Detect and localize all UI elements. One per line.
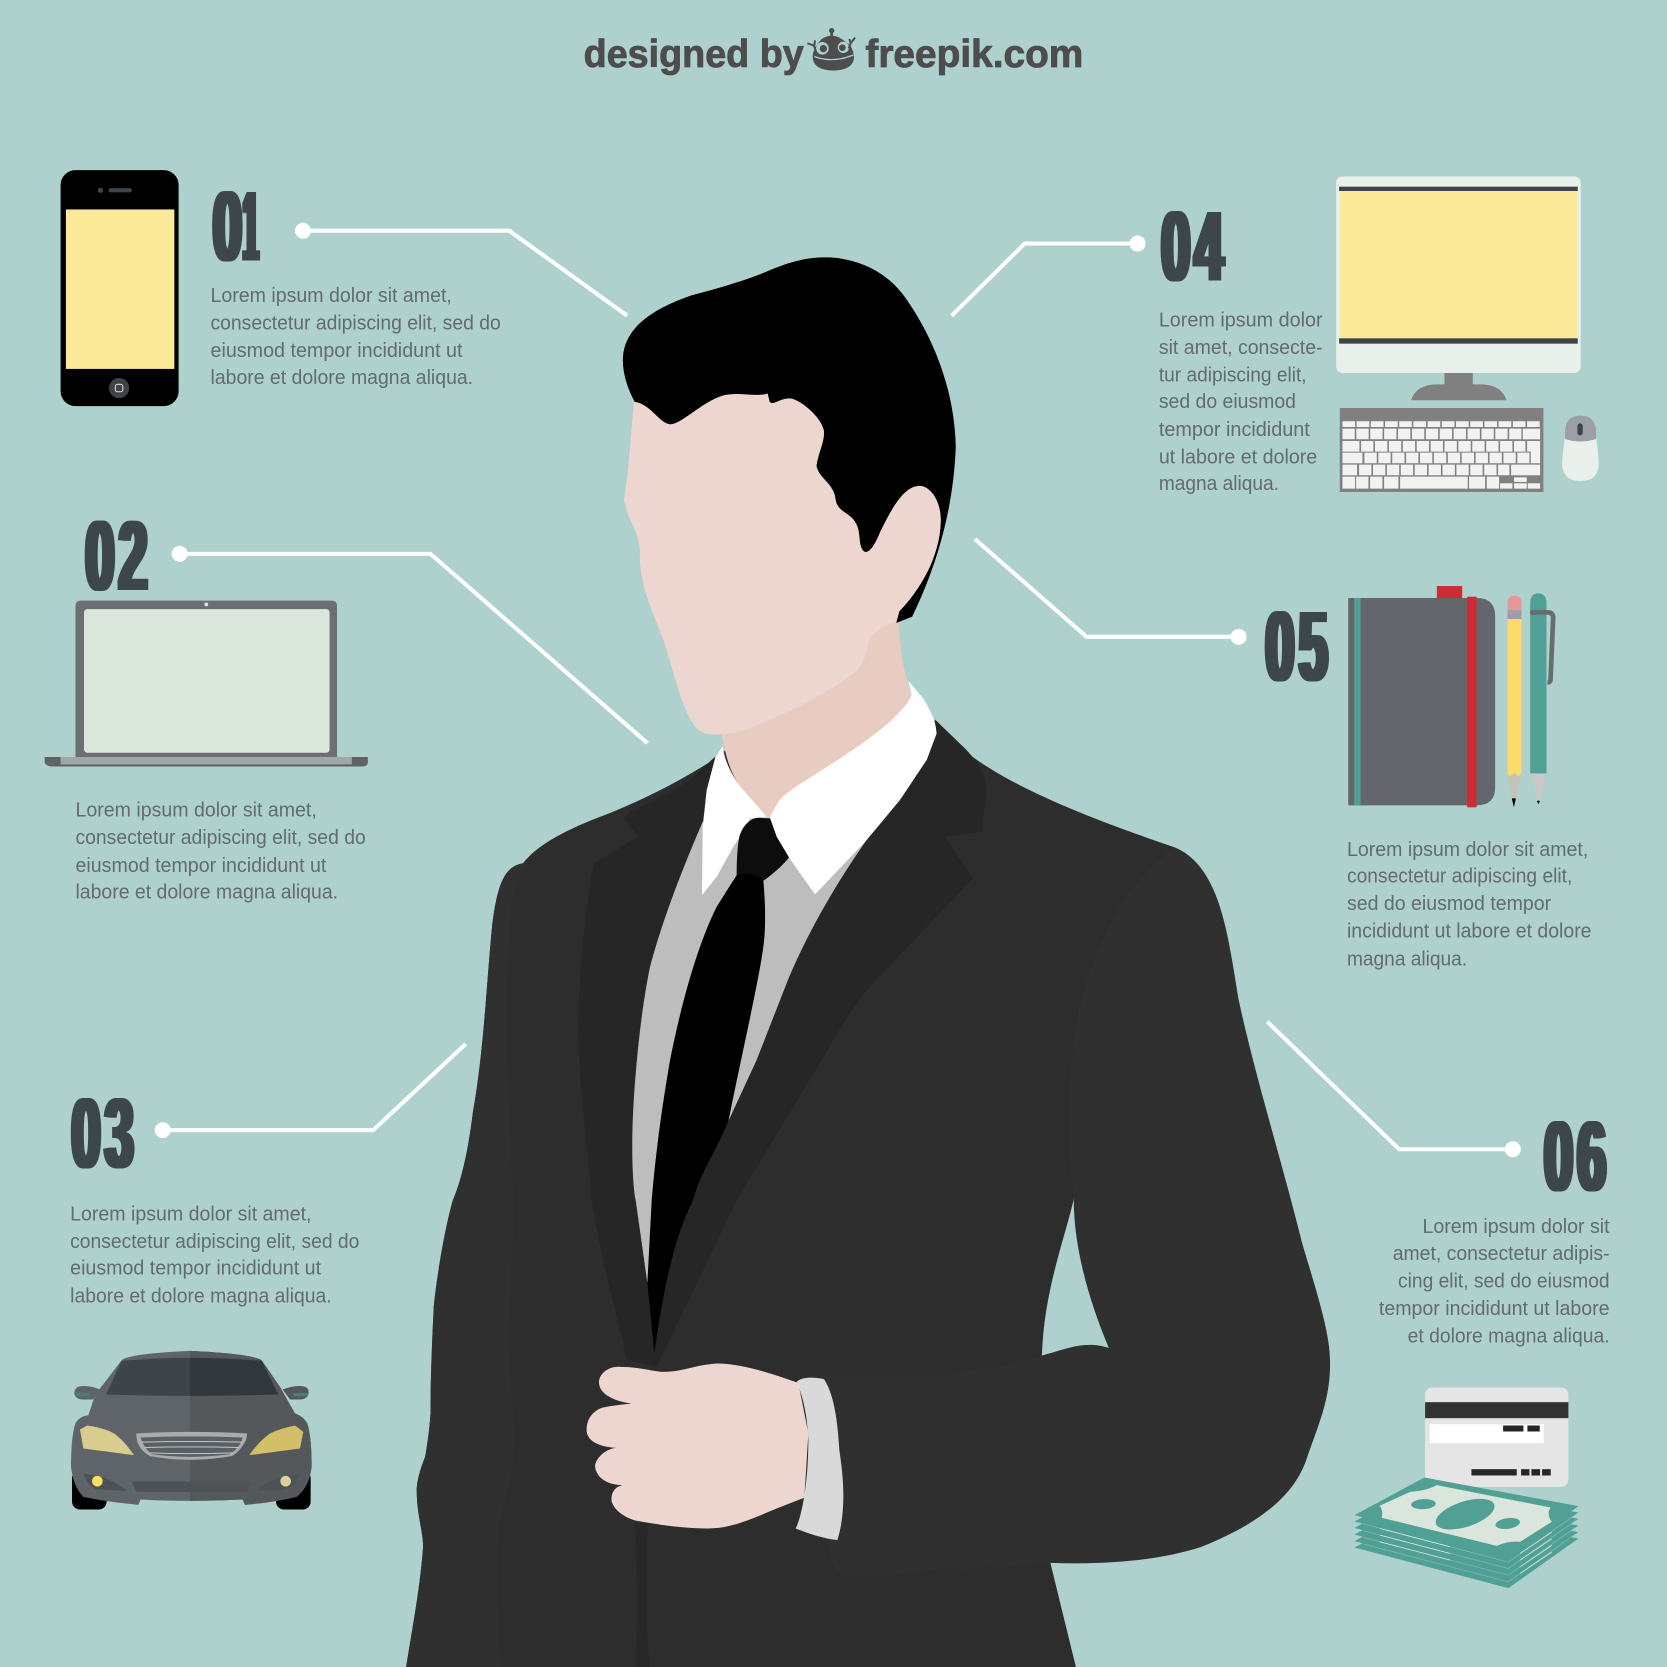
connector 04 xyxy=(952,235,1146,316)
connector 03 xyxy=(155,1044,466,1138)
pencil xyxy=(1508,596,1522,807)
neck xyxy=(722,617,912,822)
heading: 01: 0 xyxy=(213,171,242,282)
text block 04: tempor incididunt xyxy=(1159,418,1310,441)
text block 01: Lorem ipsum dolor sit amet, xyxy=(211,284,452,307)
text block 04: sed do eiusmod xyxy=(1159,390,1296,413)
shirt cuff xyxy=(796,1378,843,1540)
monitor xyxy=(1336,176,1581,400)
heading: 01 xyxy=(213,171,258,282)
mouse xyxy=(1562,416,1599,481)
text block 02: eiusmod tempor incididunt ut xyxy=(75,854,327,877)
notebook xyxy=(1348,586,1495,807)
banknotes xyxy=(1354,1477,1578,1588)
text block 03: labore et dolore magna aliqua. xyxy=(70,1284,332,1307)
tie knot xyxy=(737,818,789,881)
heading: 02: 02 xyxy=(86,501,147,611)
icon: credit card and banknotes xyxy=(1354,1388,1578,1588)
text block 05: magna aliqua. xyxy=(1347,947,1467,970)
text block 05: Lorem ipsum dolor sit amet, xyxy=(1347,838,1588,861)
text block 01: consectetur adipiscing elit, sed do xyxy=(211,312,501,335)
hair xyxy=(623,257,956,623)
text block 04: tur adipiscing elit, xyxy=(1159,364,1307,387)
header: designed by freepik.com: freepik.com xyxy=(865,32,1083,76)
figure: businessman xyxy=(406,257,1330,1667)
connector 02 xyxy=(172,546,647,743)
face xyxy=(624,372,941,735)
pen xyxy=(1530,593,1553,804)
text block 06: cing elit, sed do eiusmod xyxy=(1398,1269,1610,1292)
front seam xyxy=(635,1523,650,1667)
heading: 01: 1 xyxy=(243,173,258,282)
jacket xyxy=(406,721,1175,1667)
credit card xyxy=(1425,1388,1568,1487)
header: designed by freepik.com: designed by xyxy=(584,32,804,76)
heading: 03: 03 xyxy=(72,1078,134,1189)
heading: 06: 06 xyxy=(1544,1102,1606,1212)
icon: smartphone xyxy=(61,170,179,406)
header: designed by freepik.com xyxy=(584,28,1083,76)
text block 04: Lorem ipsum dolor xyxy=(1159,308,1323,331)
keyboard xyxy=(1340,408,1543,492)
connector 05 xyxy=(975,539,1247,645)
text block 05: consectetur adipiscing elit, xyxy=(1347,864,1572,887)
connector 06 xyxy=(1267,1022,1521,1157)
heading: 04: 04 xyxy=(1161,192,1223,302)
text block 02: Lorem ipsum dolor sit amet, xyxy=(75,798,317,821)
icon: laptop xyxy=(45,601,368,767)
left jacket panel shading xyxy=(406,859,532,1667)
text block 02: labore et dolore magna aliqua. xyxy=(75,880,338,903)
text block 01: eiusmod tempor incididunt ut xyxy=(211,339,463,362)
text block 04: sit amet, consecte- xyxy=(1159,336,1323,359)
text block 03: eiusmod tempor incididunt ut xyxy=(70,1257,321,1280)
connector 01 xyxy=(295,223,627,316)
text block 01: labore et dolore magna aliqua. xyxy=(211,366,473,389)
lapel right xyxy=(654,719,986,1367)
text block 06: et dolore magna aliqua. xyxy=(1408,1325,1610,1348)
lapel left xyxy=(578,757,715,1366)
icon: car xyxy=(71,1351,312,1510)
right arm xyxy=(823,847,1330,1577)
text block 03: consectetur adipiscing elit, sed do xyxy=(70,1230,359,1253)
tie blade xyxy=(647,873,765,1353)
text block 06: Lorem ipsum dolor sit xyxy=(1422,1215,1610,1238)
hand xyxy=(587,1363,808,1528)
text block 04: ut labore et dolore xyxy=(1159,446,1317,469)
heading: 05: 05 xyxy=(1266,591,1327,702)
text block 04: magna aliqua. xyxy=(1159,472,1279,495)
text block 05: incididunt ut labore et dolore xyxy=(1347,920,1592,943)
text block 03: Lorem ipsum dolor sit amet, xyxy=(70,1202,311,1225)
text block 05: sed do eiusmod tempor xyxy=(1347,892,1551,915)
shirt xyxy=(632,817,867,1283)
icon: desktop computer, keyboard and mouse xyxy=(1336,176,1599,492)
text block 02: consectetur adipiscing elit, sed do xyxy=(75,826,366,849)
collar xyxy=(702,681,937,895)
text block 06: amet, consectetur adipis- xyxy=(1393,1242,1610,1265)
text block 06: tempor incididunt ut labore xyxy=(1379,1297,1610,1320)
icon: notebook, pencil and pen xyxy=(1348,586,1553,807)
icon: freepik mascot xyxy=(807,28,855,71)
